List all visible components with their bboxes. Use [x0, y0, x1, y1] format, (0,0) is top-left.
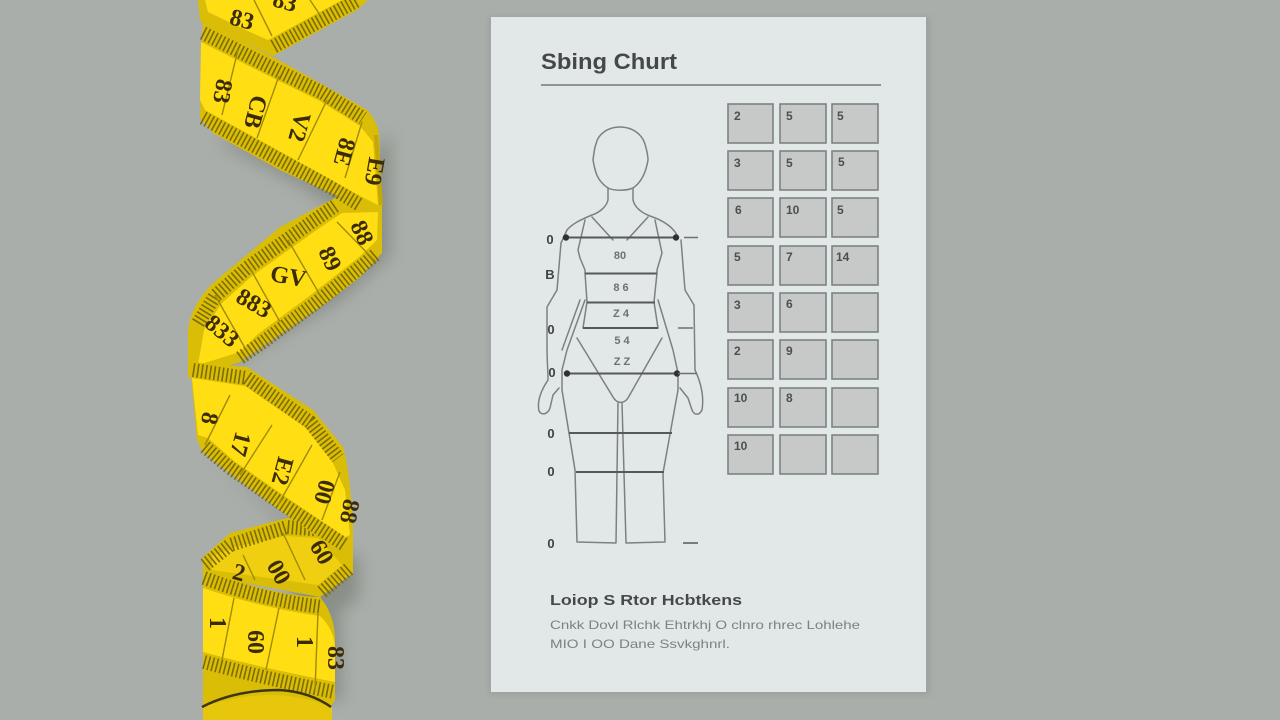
tape segment: middle curve: E2 [266, 454, 298, 488]
tape segment: lower diagonal: 833 [199, 310, 244, 353]
grid numbers [734, 109, 850, 453]
grid numbers: 5 [734, 250, 741, 264]
paper shadow [489, 17, 930, 695]
grid cells [728, 104, 878, 474]
side markers: 0 [548, 365, 556, 380]
title rule [541, 84, 881, 86]
tape segment: top [198, 0, 368, 56]
tape segment: middle curve: 17 [224, 429, 255, 459]
notes text [550, 618, 860, 651]
tape segment: lower diagonal: GV [268, 261, 309, 293]
body labels: Z 4 [613, 308, 630, 320]
tape segment: back of coil: 60 [304, 536, 338, 569]
tape segment: middle curve: 88 [334, 497, 364, 525]
tape segment: middle curve [190, 362, 364, 573]
grid numbers: 5 [786, 156, 793, 170]
side markers: B [545, 267, 555, 282]
tape segment: upper diagonal: E9 [359, 155, 389, 187]
notes text: Cnkk Dovl Rlchk Ehtrkhj O clnro rhrec Lohlehe [550, 618, 860, 632]
tape segment: back of coil [203, 518, 353, 597]
grid numbers: 3 [734, 298, 741, 312]
tape segment: front coil: 1 [204, 617, 230, 629]
grid numbers: 9 [786, 344, 793, 358]
body labels [613, 250, 631, 368]
hips and legs [562, 300, 678, 543]
body labels: 80 [614, 250, 626, 262]
grid numbers: 5 [838, 155, 845, 169]
measure lines: thigh [569, 433, 698, 543]
grid numbers: 7 [786, 250, 793, 264]
tape segment: front coil: 1 [291, 636, 317, 648]
notes heading: Loiop S Rtor Hcbtkens [550, 592, 742, 609]
title: Sbing Churt [541, 49, 678, 74]
tape segment: upper diagonal [200, 20, 389, 207]
crotch line [577, 338, 662, 402]
tape segment: lower diagonal: 883 [231, 284, 276, 324]
grid numbers: 5 [837, 109, 844, 123]
tape segment: upper diagonal: V2 [282, 109, 315, 144]
grid numbers: 8 [786, 391, 793, 405]
grid numbers: 3 [734, 156, 741, 170]
side markers: 0 [547, 426, 555, 441]
side markers: 0 [547, 464, 555, 479]
paper sheet [491, 17, 926, 692]
tape segment: top: 83 [227, 5, 257, 36]
measure lines: waist [583, 274, 693, 328]
grid numbers: 10 [734, 391, 748, 405]
tape segment: middle curve: 8 [195, 410, 223, 426]
tape segment: middle curve: 00 [308, 477, 339, 507]
tape segment: back of coil: 2 [230, 559, 248, 587]
measure line: hip [564, 370, 697, 377]
side markers: 0 [547, 536, 555, 551]
grid numbers: 6 [735, 203, 742, 217]
tape segment: upper diagonal: CB [238, 92, 272, 131]
body diagram [538, 127, 703, 551]
tape segment: lower diagonal: 88 [344, 217, 378, 249]
measuring tape [188, 0, 389, 720]
tape segment: front coil [202, 568, 348, 720]
tape segment: upper diagonal: 8E [328, 135, 360, 169]
head [593, 127, 648, 190]
right arm and hand [680, 240, 703, 414]
body labels: 5 4 [614, 335, 631, 347]
grid numbers: 2 [734, 344, 741, 358]
tape segment: front coil: 83 [322, 646, 348, 670]
neck and shoulders [561, 188, 677, 243]
grid numbers: 14 [836, 250, 850, 264]
left arm and hand [538, 243, 580, 414]
tape segment: lower diagonal: 89 [312, 243, 346, 275]
body labels: Z Z [614, 356, 631, 368]
tape segment: front coil: 60 [242, 630, 268, 654]
size grid [728, 104, 878, 474]
body labels: 8 6 [613, 282, 629, 294]
grid numbers: 10 [786, 203, 800, 217]
grid numbers: 5 [786, 109, 793, 123]
tape shadow [205, 130, 390, 700]
side markers [545, 232, 556, 551]
measure line: bust [563, 234, 698, 241]
side markers: 0 [547, 322, 555, 337]
tape segment: back of coil: 00 [261, 556, 295, 589]
grid numbers: 10 [734, 439, 748, 453]
grid numbers: 6 [786, 297, 793, 311]
grid numbers: 5 [837, 203, 844, 217]
torso bust [578, 217, 662, 328]
grid numbers: 2 [734, 109, 741, 123]
tape segment: lower diagonal [188, 197, 382, 378]
side markers: 0 [546, 232, 554, 247]
notes text: MIO I OO Dane Ssvkghnrl. [550, 637, 730, 651]
tape segment: upper diagonal: 83 [207, 77, 237, 105]
